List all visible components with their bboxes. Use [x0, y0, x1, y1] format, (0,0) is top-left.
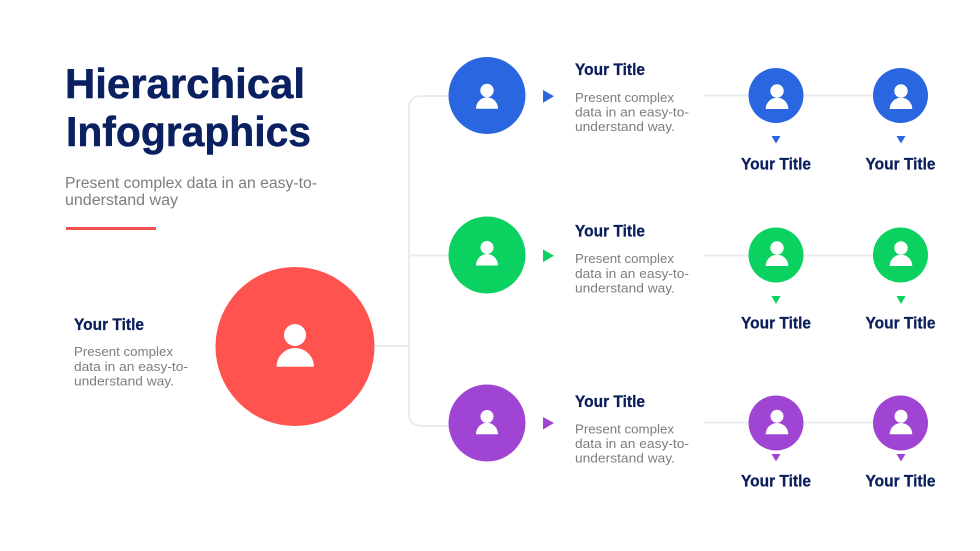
branch: purple	[448, 384, 936, 490]
green text block	[575, 222, 689, 296]
blue child 2	[866, 68, 936, 174]
title accent rule	[66, 227, 156, 230]
purple text block: understand way.	[575, 450, 675, 466]
blue child 1: Your Title	[741, 156, 811, 174]
blue text block: data in an easy-to-	[575, 104, 689, 120]
title	[65, 60, 311, 155]
green main node	[448, 216, 526, 294]
title: Infographics	[66, 108, 311, 155]
subtitle: understand way	[65, 192, 178, 209]
green text block: data in an easy-to-	[575, 266, 689, 281]
blue child 1	[741, 68, 811, 174]
purple text block: Your Title	[575, 393, 645, 411]
green child 2: Your Title	[866, 314, 936, 332]
connector tree	[375, 96, 875, 426]
purple child 2: Your Title	[866, 472, 936, 490]
root node text: Present complex	[74, 344, 174, 359]
green child 1	[741, 228, 811, 332]
subtitle: Present complex data in an easy-to-	[65, 175, 317, 192]
green arrow	[543, 250, 554, 262]
root node text: Your Title	[74, 316, 144, 334]
blue main node	[448, 57, 526, 134]
root node: red circle with person icon	[216, 267, 374, 426]
blue text block: understand way.	[575, 119, 675, 134]
green child 2	[866, 228, 936, 332]
branch: green	[448, 216, 936, 332]
root node text: data in an easy-to-	[74, 359, 188, 374]
blue child 2: Your Title	[866, 156, 936, 174]
purple text block: Present complex	[575, 422, 675, 436]
green child 1: Your Title	[741, 314, 811, 332]
purple text block	[575, 393, 689, 466]
root node text	[74, 316, 188, 388]
title: Hierarchical	[65, 60, 305, 107]
green text block: Your Title	[575, 222, 645, 240]
purple arrow	[543, 417, 554, 430]
purple main node	[448, 384, 526, 462]
green text block: understand way.	[575, 280, 675, 296]
purple text block: data in an easy-to-	[575, 436, 689, 451]
blue arrow	[543, 90, 554, 103]
purple child 1: Your Title	[741, 472, 811, 490]
root node text: understand way.	[74, 374, 174, 388]
purple child 1	[741, 396, 811, 490]
blue text block: Present complex	[575, 90, 675, 105]
subtitle	[65, 175, 317, 209]
blue text block	[575, 61, 689, 134]
branch: blue	[448, 57, 936, 174]
blue text block: Your Title	[575, 61, 645, 79]
purple child 2	[866, 396, 936, 490]
green text block: Present complex	[575, 251, 675, 266]
